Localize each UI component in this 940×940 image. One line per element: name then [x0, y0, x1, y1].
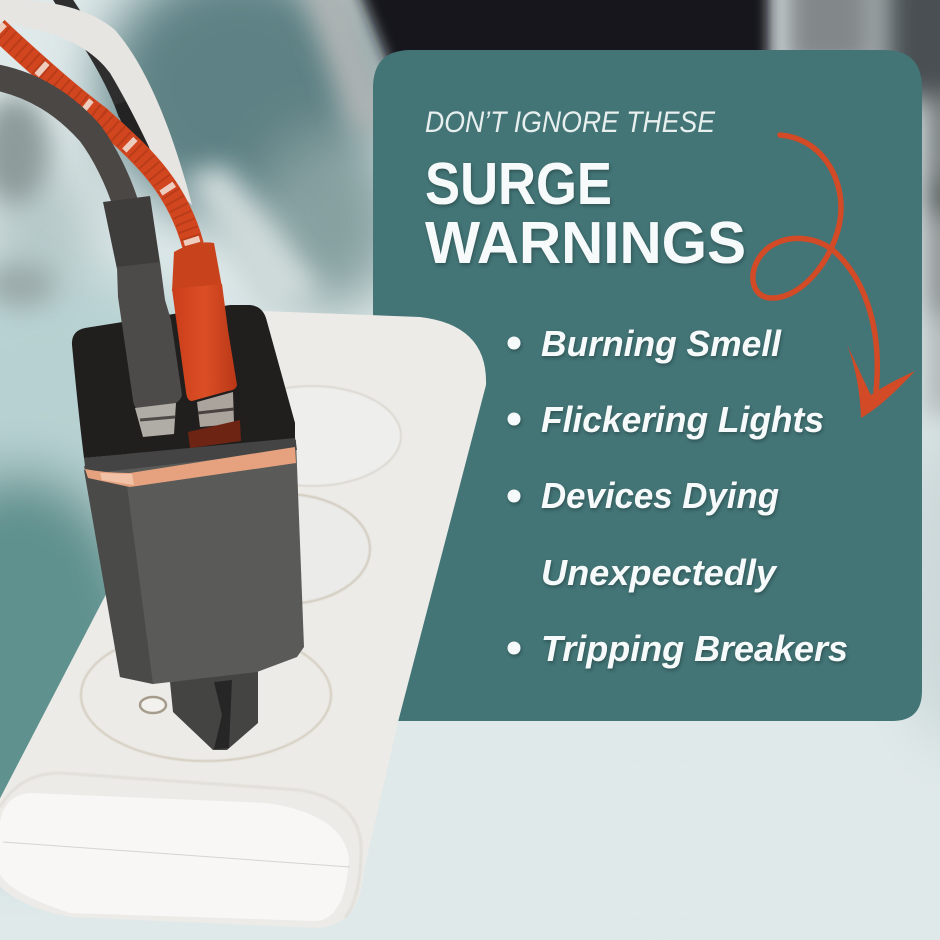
power strip	[0, 311, 486, 928]
socket pin hole	[140, 697, 166, 713]
socket: middle	[200, 494, 370, 604]
heading: main title: SURGE	[425, 151, 612, 217]
warning list: Tripping Breakers	[541, 628, 848, 669]
white cable	[0, 0, 192, 205]
warning list: Unexpectedly	[541, 552, 778, 593]
charger prong	[170, 670, 258, 750]
socket: top	[223, 386, 401, 486]
heading: main title: WARNINGS	[425, 210, 746, 276]
heading: kicker: DON’T IGNORE THESE	[425, 106, 716, 139]
warning list	[508, 323, 848, 669]
curly arrow	[753, 135, 915, 418]
warning list: Burning Smell	[541, 323, 782, 364]
red braided cable	[0, 28, 193, 245]
heading: main title	[425, 151, 746, 276]
socket: bottom	[81, 629, 331, 761]
teal panel	[373, 50, 922, 721]
grey plug	[103, 196, 182, 437]
warning list: Flickering Lights	[541, 399, 824, 440]
warning list: Devices Dying	[541, 475, 779, 516]
red plug	[172, 242, 241, 448]
copper band	[85, 447, 296, 487]
strip end cap	[0, 773, 361, 921]
rear dark cable	[60, 0, 127, 115]
phone charger	[72, 305, 304, 750]
charger top face	[72, 305, 295, 458]
charger body	[84, 440, 304, 684]
dark cable connector	[115, 96, 158, 160]
grey cable	[0, 77, 126, 205]
